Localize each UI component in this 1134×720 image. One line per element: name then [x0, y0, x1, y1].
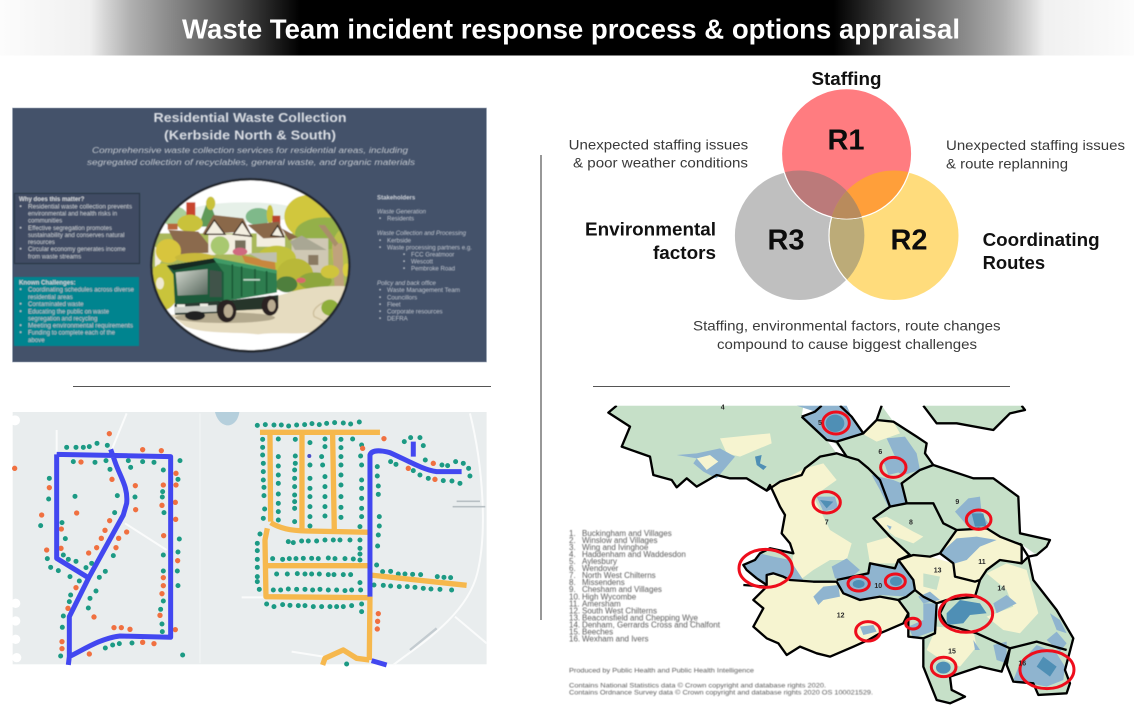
heading: staffing: Staffing — [812, 69, 882, 89]
map legend: district names: Wing and Ivinghoe — [582, 543, 649, 552]
map legend: district names: 3. — [569, 543, 576, 552]
map legend: district names: 15. — [569, 628, 580, 636]
text: compound challenges note — [693, 318, 1001, 352]
stakeholders list: Stakeholders — [377, 194, 416, 201]
map legend: district names: South West Chilterns — [582, 606, 657, 616]
stakeholders list: Pembroke Road — [411, 266, 455, 273]
callout: known challenges: • — [20, 301, 22, 308]
stakeholders list: FCC Greatmoor — [411, 251, 454, 258]
callout: why does this matter: communities — [28, 218, 62, 225]
stakeholders list: • — [403, 251, 405, 258]
slide heading — [87, 111, 416, 167]
callout: known challenges: residential areas — [28, 294, 73, 301]
slide heading: Residential Waste Collection — [154, 111, 346, 125]
stakeholders list: • — [403, 266, 405, 273]
venn circle: R1 — [782, 89, 912, 219]
map legend: district names: Buckingham and Villages — [582, 529, 672, 538]
callout: why does this matter: Circular economy generates income — [28, 246, 126, 253]
callout: why does this matter: from waste streams — [28, 253, 81, 260]
map legend: district names: Amersham — [582, 600, 621, 608]
map credits: Contains National Statistics data © Crown copyright and database rights 2020. — [569, 681, 826, 689]
title banner: Waste Team incident response process & options appraisal — [182, 14, 960, 44]
slide heading: (Kerbside North & South) — [164, 128, 336, 142]
map legend: district names: 4. — [569, 550, 576, 559]
stakeholders list: • — [403, 259, 405, 266]
map district boundaries — [608, 406, 1073, 703]
heading: coordinating routes — [983, 230, 1100, 273]
heading: environmental factors — [585, 220, 716, 263]
map district fills — [608, 406, 1073, 703]
venn circle: R3 — [734, 170, 864, 300]
venn label: R1: R1 — [827, 124, 865, 156]
callout: why does this matter: Effective segregation promotes — [28, 225, 112, 232]
map legend: district names: 16. — [569, 634, 580, 644]
route: orange — [260, 432, 467, 665]
slide heading: segregated collection of recyclables, general waste, and organic materials — [87, 157, 416, 167]
stakeholders list: • — [379, 216, 381, 223]
district numbers: 11 — [978, 559, 986, 566]
stakeholders list — [377, 194, 472, 323]
map legend: district names: 2. — [569, 536, 576, 545]
district numbers: 6 — [878, 449, 882, 456]
callout: known challenges: Contaminated waste — [28, 301, 84, 308]
callout: known challenges: • — [20, 287, 22, 294]
stakeholders list: • — [379, 244, 381, 251]
callout: known challenges: Known Challenges: — [19, 280, 76, 287]
map legend: district names: Wendover — [582, 564, 619, 573]
callout: known challenges: Educating the public on waste — [28, 308, 110, 315]
stakeholders list: Kerbside — [387, 237, 412, 244]
district numbers: 13 — [934, 568, 942, 575]
stakeholders list: Councillors — [387, 294, 417, 301]
map base: roads and lake — [10, 412, 487, 665]
overlap: centre — [832, 191, 862, 219]
callout: why does this matter: • — [20, 246, 22, 253]
stakeholders list: Residents — [387, 216, 414, 223]
callout: known challenges: Funding to complete each of the — [28, 330, 116, 337]
venn label: R3: R3 — [767, 224, 805, 256]
map legend: district names — [569, 529, 721, 644]
divider: right horizontal — [593, 386, 1010, 388]
text: staffing and route note: Unexpected staffing issues — [946, 137, 1125, 153]
map credits — [569, 668, 873, 696]
text: staffing and weather note — [569, 136, 748, 171]
stakeholders list: • — [379, 309, 381, 316]
callout: why does this matter: environmental and health risks in — [28, 211, 117, 218]
heading: coordinating routes: Coordinating — [983, 230, 1100, 250]
stakeholders list: Waste Generation — [377, 209, 427, 216]
callout: why does this matter: Why does this matter? — [19, 196, 85, 203]
panel: route map — [10, 412, 487, 665]
map legend: district names: 1. — [569, 529, 576, 538]
callout: known challenges: Meeting environmental requirements — [28, 323, 133, 330]
map credits: Produced by Public Health and Public Health Intelligence — [569, 668, 754, 674]
callout: why does this matter: sustainability and conserves natural — [28, 232, 125, 239]
map legend: district names: Beeches — [582, 628, 613, 636]
panel: residential waste collection slide — [12, 108, 486, 362]
route: blue — [57, 442, 462, 665]
callout: why does this matter: Residential waste collection prevents — [28, 203, 132, 210]
callout: known challenges: • — [20, 308, 22, 315]
stakeholders list: Corporate resources — [387, 309, 443, 316]
district numbers — [721, 405, 1026, 667]
text: staffing and route note: & route replanning — [946, 156, 1068, 172]
district numbers: 10 — [874, 583, 882, 590]
callout: known challenges: • — [20, 330, 22, 337]
map legend: district names: 5. — [569, 557, 576, 566]
callout: known challenges: above — [28, 337, 45, 344]
venn label: R2: R2 — [890, 224, 928, 256]
stakeholders list: Waste Collection and Processing — [377, 230, 467, 237]
venn circle: R2 — [829, 170, 959, 300]
callout: why does this matter: • — [20, 203, 22, 210]
text: staffing and route note — [946, 137, 1125, 172]
callout: known challenges: • — [20, 323, 22, 330]
district numbers: 5 — [818, 420, 822, 427]
callout: known challenges: Coordinating schedules across diverse — [28, 287, 135, 294]
text: compound challenges note: Staffing, environmental factors, route changes — [693, 318, 1001, 334]
map legend: district names: Denham, Gerrards Cross and Chalfont — [582, 620, 721, 630]
stakeholders list: • — [379, 316, 381, 323]
map legend: district names: Wexham and Ivers — [582, 634, 649, 644]
text: staffing and weather note: & poor weather conditions — [573, 155, 748, 171]
stakeholders list: Waste processing partners e.g. — [387, 244, 472, 251]
map legend: district names: 11. — [569, 600, 580, 608]
chart: Venn diagram of risks — [734, 89, 959, 300]
map legend: district names: Aylesbury — [582, 557, 617, 566]
map credits: Contains Ordnance Survey data © Crown copyright and database rights 2020 OS 100021529. — [569, 688, 873, 696]
stakeholders list: Waste Management Team — [387, 287, 460, 294]
text: staffing and weather note: Unexpected staffing issues — [569, 136, 748, 152]
map legend: district names: 9. — [569, 585, 576, 594]
text: compound challenges note: compound to cause biggest challenges — [717, 336, 977, 352]
slide heading: Comprehensive waste collection services for residential areas, including — [92, 145, 408, 155]
map legend: district names: 7. — [569, 571, 576, 580]
district numbers: 4 — [721, 405, 725, 412]
heading: coordinating routes: Routes — [983, 253, 1045, 273]
hotspot circles — [739, 412, 1074, 689]
map legend: district names: Beaconsfield and Chepping Wye — [582, 614, 699, 622]
stakeholders list: Fleet — [387, 301, 401, 308]
callout: why does this matter: • — [20, 225, 22, 232]
district numbers: 14 — [997, 586, 1005, 593]
stakeholders list: Wescott — [411, 259, 433, 266]
stakeholders list: • — [379, 301, 381, 308]
overlap: R1 and R2 — [832, 170, 910, 220]
callout: known challenges — [14, 277, 139, 346]
map legend: district names: Missendens — [582, 578, 625, 587]
callout: why does this matter — [14, 194, 140, 264]
divider: left horizontal — [73, 386, 491, 388]
map legend: district names: 10. — [569, 592, 580, 602]
panel: district deprivation map — [608, 405, 1074, 703]
heading: environmental factors: factors — [653, 243, 716, 263]
district numbers: 9 — [955, 499, 959, 506]
illustration: waste truck on residential street — [145, 175, 358, 355]
map legend: district names: Haddenham and Waddesdon — [582, 550, 686, 559]
callout: known challenges: segregation and recycling — [28, 315, 97, 322]
map legend: district names: 13. — [569, 614, 580, 622]
map legend: district names: Winslow and Villages — [582, 536, 657, 545]
district numbers: 15 — [948, 649, 956, 656]
overlap: R2 and R3 — [828, 190, 864, 280]
stakeholders list: DEFRA — [387, 316, 409, 323]
collection points: orange — [15, 434, 435, 654]
overlap: R1 and R3 — [784, 170, 862, 220]
map legend: district names: 6. — [569, 564, 576, 573]
stakeholders list: Policy and back office — [377, 280, 437, 287]
district numbers: 7 — [825, 520, 829, 527]
district numbers: 12 — [837, 613, 845, 620]
collection points: teal — [41, 422, 470, 664]
map legend: district names: 12. — [569, 606, 580, 616]
divider: centre vertical — [540, 155, 542, 620]
district numbers: 8 — [909, 520, 913, 527]
title banner — [0, 0, 1134, 56]
map legend: district names: Chesham and Villages — [582, 585, 662, 594]
stakeholders list: • — [379, 237, 381, 244]
map legend: district names: 8. — [569, 578, 576, 587]
stakeholders list: • — [379, 287, 381, 294]
map legend: district names: North West Chilterns — [582, 571, 656, 580]
district numbers: 16 — [1018, 660, 1026, 667]
map legend: district names: 14. — [569, 620, 580, 630]
stakeholders list: • — [379, 294, 381, 301]
map legend: district names: High Wycombe — [582, 592, 637, 602]
heading: environmental factors: Environmental — [585, 220, 716, 240]
callout: why does this matter: resources — [28, 239, 55, 246]
